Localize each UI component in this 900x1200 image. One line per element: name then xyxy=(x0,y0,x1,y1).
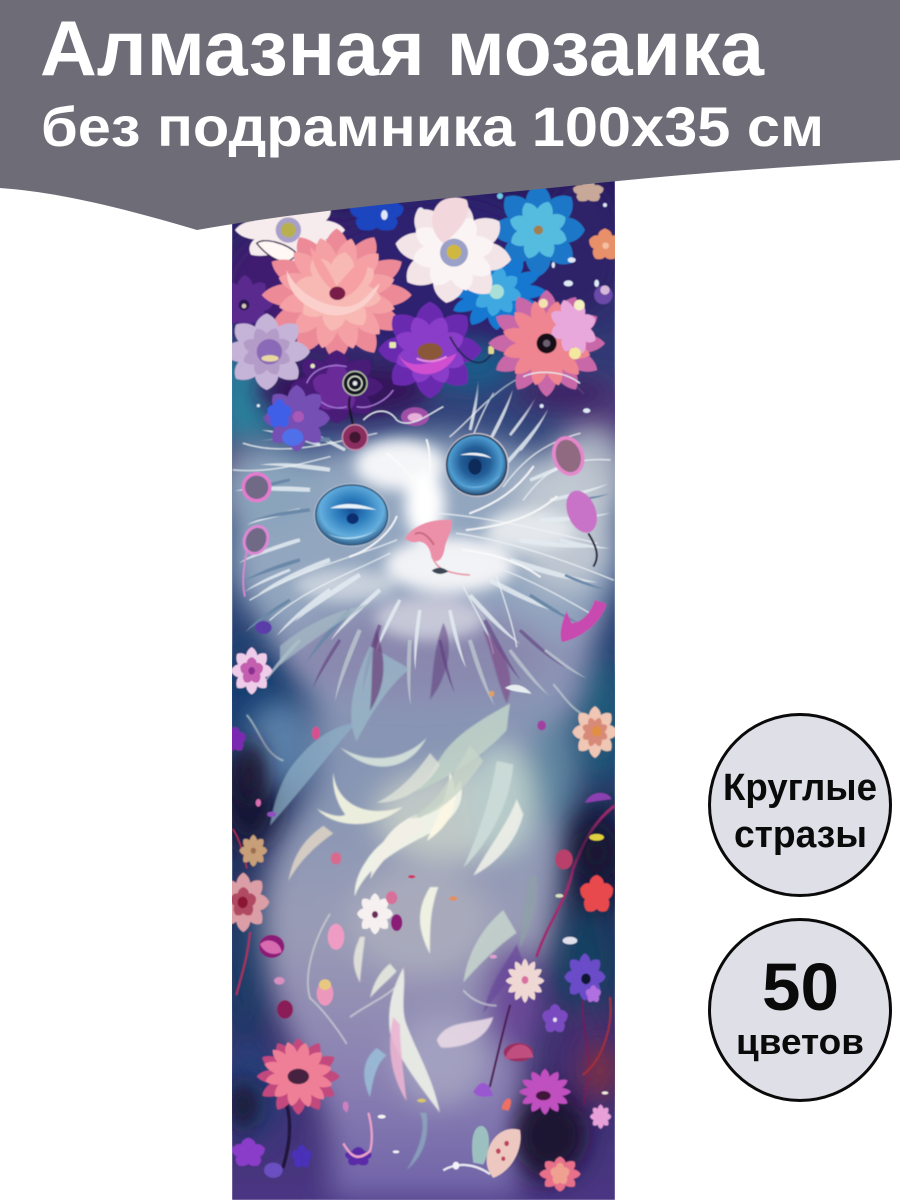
flower: pink large xyxy=(262,223,412,364)
flower: bottom blue violet xyxy=(291,1144,312,1168)
sparkle dots xyxy=(257,193,607,413)
tulip buds xyxy=(255,600,612,1178)
flower: coral xyxy=(539,1156,581,1192)
flower: blue and violet small xyxy=(263,385,330,452)
flower: pink right xyxy=(488,290,605,397)
ornament: third eye xyxy=(363,407,443,426)
title: Алмазная мозаика xyxy=(40,4,765,92)
fur tufts xyxy=(235,380,610,670)
left eye xyxy=(314,483,389,547)
ornament: left ring xyxy=(243,474,270,501)
flower: white large xyxy=(388,192,518,311)
flower: dark right edge xyxy=(594,285,613,304)
flower: blue top right xyxy=(492,183,585,277)
badge: round rhinestones xyxy=(710,714,890,896)
flower: purple lower xyxy=(542,1003,568,1033)
cat body xyxy=(245,600,600,1200)
painting background xyxy=(215,170,635,1200)
flower: orange right xyxy=(587,228,623,263)
lower floral decorations xyxy=(217,600,618,1192)
flower: pink right edge xyxy=(590,1104,611,1129)
flower: purple bottom centre xyxy=(343,1113,373,1167)
balloon ornaments xyxy=(240,434,603,597)
flower: dusty rose xyxy=(232,872,270,933)
flower: white top left xyxy=(235,195,345,265)
flower: peach right xyxy=(572,706,618,758)
header banner xyxy=(0,0,900,230)
badge: 50 colours xyxy=(710,920,890,1100)
flower: purple centre xyxy=(378,302,494,398)
chest fur feathers xyxy=(247,604,583,1170)
flower: pink left xyxy=(231,647,272,695)
flower: purple left edge xyxy=(232,726,246,752)
flower: magenta xyxy=(519,1069,571,1115)
badge: 50 colours: цветов xyxy=(736,1021,864,1062)
badge: round rhinestones: Круглые xyxy=(723,767,877,809)
subtitle: без подрамника 100х35 см xyxy=(41,95,824,158)
flower: red xyxy=(578,875,615,916)
crown backdrop xyxy=(220,180,620,420)
cat head fur xyxy=(220,374,630,708)
flower: small violet xyxy=(585,985,602,1004)
flower crown xyxy=(217,180,623,452)
dark stems xyxy=(233,807,613,1166)
small petals xyxy=(256,685,608,1153)
nose xyxy=(405,520,470,575)
flower: lilac left xyxy=(223,313,310,390)
flower: dark purple with curls xyxy=(290,350,393,423)
ornament: right ring xyxy=(551,435,585,476)
right eye xyxy=(445,433,509,497)
flower: pink daisy xyxy=(257,1033,340,1116)
flower: violet xyxy=(564,953,606,1001)
badge: round rhinestones: стразы xyxy=(734,814,867,856)
panel: cat painting xyxy=(215,170,635,1200)
flower: tan xyxy=(239,835,267,867)
flower: blue lower xyxy=(447,253,547,330)
flower: tan top right xyxy=(571,180,606,204)
cat face xyxy=(314,433,509,575)
flower: white centre xyxy=(357,893,393,934)
whiskers and fine fur xyxy=(233,374,613,653)
flower: dark left xyxy=(217,275,273,332)
butterfly xyxy=(443,1126,521,1178)
ornament: left teardrop xyxy=(242,524,270,598)
flower: cream xyxy=(506,959,544,1003)
ornament: right filled balloon xyxy=(566,490,598,568)
badge: 50 colours: 50 xyxy=(762,950,839,1025)
ornament: black spiral with pendant xyxy=(342,371,368,450)
flower: blue top navy xyxy=(346,193,425,234)
flower: purple bottom left xyxy=(232,1137,266,1167)
